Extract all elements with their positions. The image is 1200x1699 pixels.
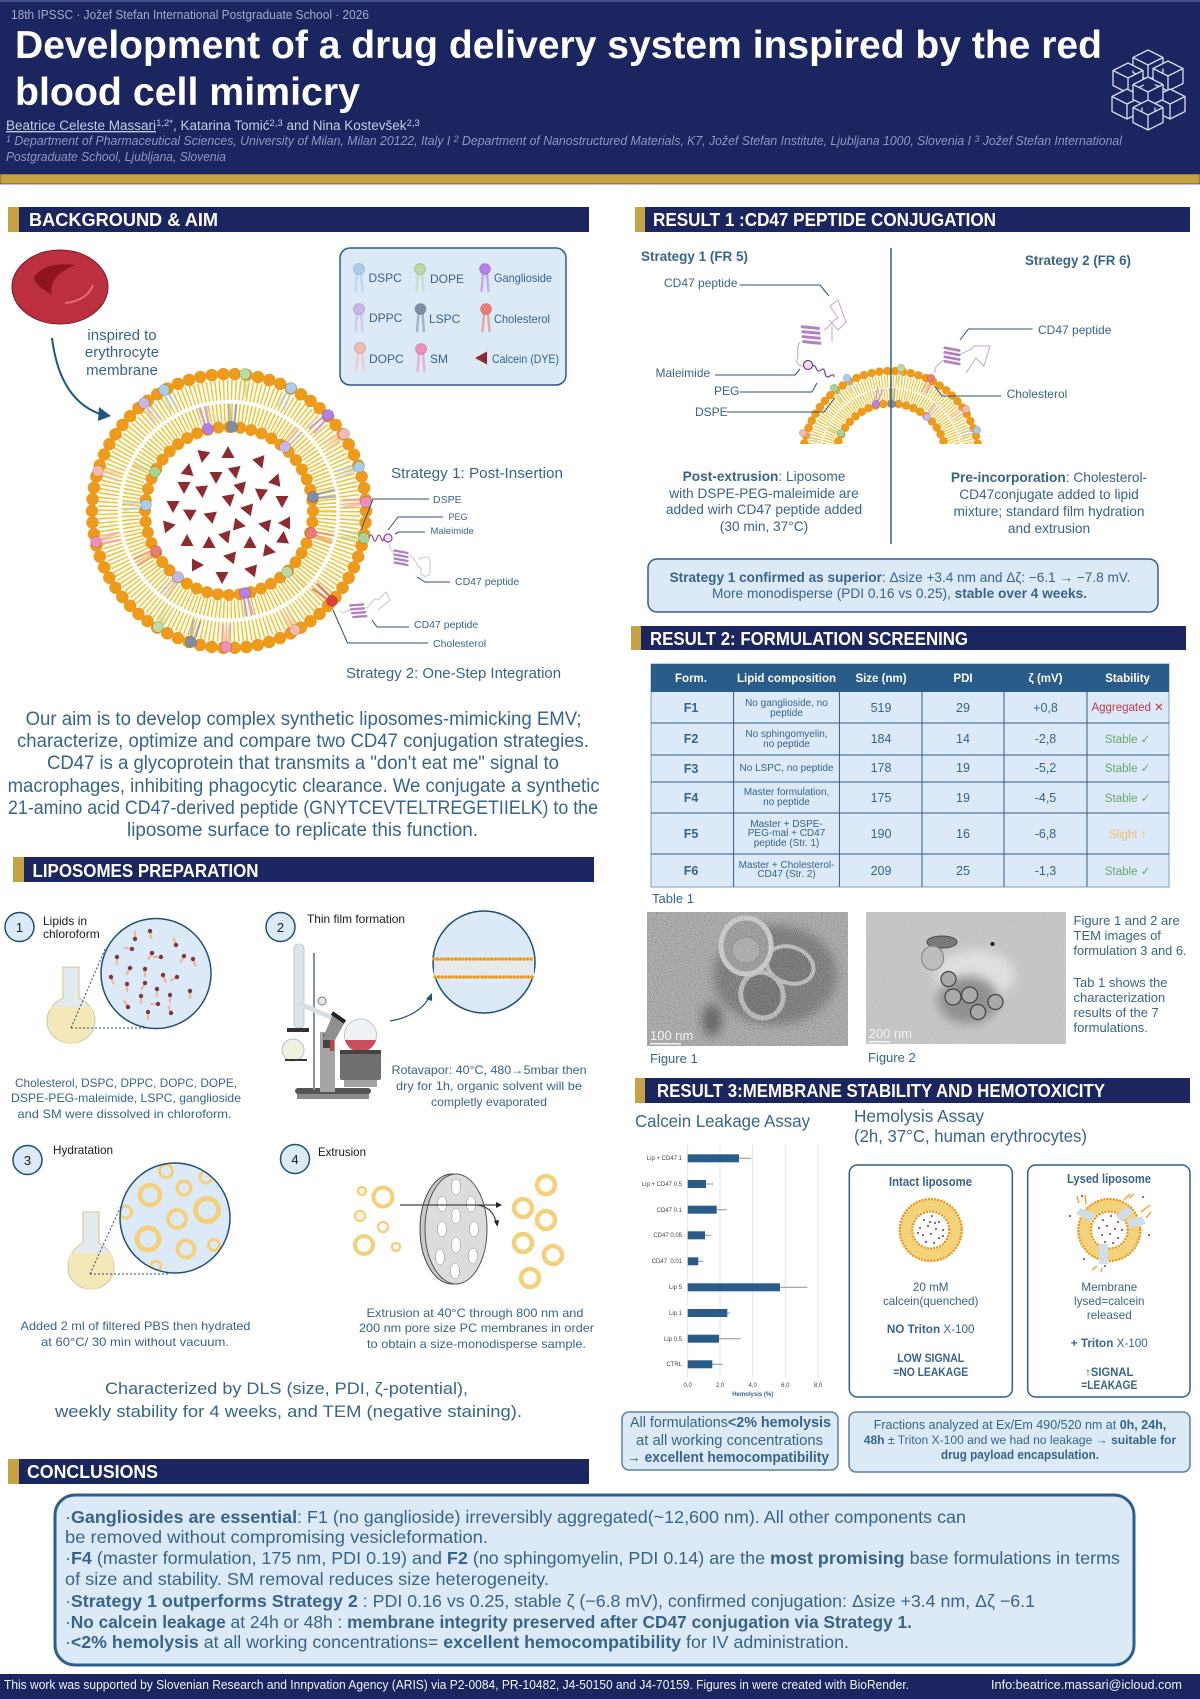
authors [6,118,420,133]
strategy 2 label: Strategy 2: One-Step Integration [346,665,561,682]
strategy 1 callouts: DSPE [695,405,728,419]
bar chart: hemolysis: Lip 1 [669,1311,683,1317]
affiliations: 2 [453,134,459,144]
step 1 description [11,1076,241,1121]
title: Development of a drug delivery system inspired by the red [15,24,1102,67]
bar chart: hemolysis: Lip 0.5 [664,1337,683,1343]
step 2 description: dry for 1h, organic solvent will be [396,1079,582,1093]
icon: polydisperse vesicles [355,1187,400,1254]
conclusions text: of size and stability. SM removal reduces size heterogeneity. [65,1569,549,1589]
legend: DPPC [369,311,403,325]
bar chart: hemolysis: CD47 0.01 [652,1259,683,1265]
table values: 29 [956,701,970,715]
step 1 description: and SM were dissolved in chloroform. [18,1107,232,1121]
aim paragraph: liposome surface to replicate this function. [127,820,478,841]
strategy 2 description [951,470,1147,536]
card: intact liposome: Intact liposome [889,1175,972,1189]
legend: DSPC [368,271,402,285]
bar chart: hemolysis: Lip + CD47 1 [647,1156,683,1162]
zoom circle: thin film [433,911,535,1013]
conclusions text: ·F4 (master formulation, 175 nm, PDI 0.19) and F2 (no sphingomyelin, PDI 0.14) are the most promising base formulations in terms [65,1548,1120,1568]
table lipid compositions: No LSPC, no peptide [740,763,834,774]
legend: DOPE [430,272,464,286]
title [15,24,1102,114]
table values: 190 [871,827,891,841]
bar chart: hemolysis: Lip 5 [669,1285,683,1291]
table row labels: F1 [684,701,698,715]
authors: , Katarina Tomić [173,118,270,133]
table values: 178 [871,761,891,775]
step 3 title: Hydratation [53,1143,113,1157]
table values [871,701,1058,878]
strategy 2 callouts [934,323,1112,401]
panel: background diagram [12,248,566,682]
bar chart: hemolysis: CD47 0.1 [657,1208,683,1214]
bar chart: hemolysis [642,1145,823,1398]
legend: LSPC [429,312,461,326]
table header: Form. [675,673,707,685]
panel: step 1 lipids in chloroform [5,912,241,1121]
callout: hemocompatibility: at all working concentrations [636,1432,823,1449]
figure description text: formulations. [1074,1020,1148,1035]
hemolysis heading: (2h, 37°C, human erythrocytes) [854,1126,1087,1146]
characterization text [54,1379,522,1421]
panel: conclusions [55,1495,1134,1665]
inspired to erythrocyte membrane label: membrane [86,362,158,379]
card: lysed liposome: + Triton X-100 [1071,1337,1148,1350]
step 4 description: 200 nm pore size PC membranes in order [359,1321,594,1335]
footer [0,1674,1200,1699]
step badge 1: 1 [16,920,23,935]
title: blood cell mimicry [15,71,360,114]
arrow: rbc to liposome [52,338,111,421]
step badge 1 [5,912,34,942]
callout: strategy 1 superior [648,559,1158,612]
step 1 description: DSPE-PEG-maleimide, LSPC, ganglioside [11,1091,241,1105]
step badge 4: 4 [291,1152,299,1167]
conclusions text: ·Strategy 1 outperforms Strategy 2 : PDI 0.16 vs 0.25, stable ζ (−6.8 mV), confirmed conjugation: Δsize +3.4 nm, Δζ −6.1 [65,1591,1035,1611]
table stability [1091,702,1164,878]
legend: DOPC [369,352,404,366]
table values: 519 [871,701,891,715]
bar chart: hemolysis: 8,0 [814,1383,823,1389]
callout: hemocompatibility: All formulations<2% hemolysis [630,1414,831,1431]
authors: 2,3 [270,118,283,129]
step 1 title [43,914,100,941]
heading: background and aim: BACKGROUND & AIM [29,210,218,230]
bar chart: hemolysis: CTRL [666,1362,683,1368]
table values: -1,3 [1035,864,1056,878]
strategy 2 callouts: Cholesterol [1007,387,1067,401]
bar chart: hemolysis: CD47 0.05 [653,1233,683,1239]
table stability: Slight ↑ [1109,829,1146,841]
strategy 2 description: CD47conjugate added to lipid [959,487,1139,502]
aim paragraph: macrophages, inhibiting phagocytic clearance. We conjugate a synthetic [8,776,600,797]
affiliations: Jožef Stefan International [979,134,1123,148]
table values: -2,8 [1035,732,1056,746]
step 2 description: completly evaporated [431,1095,547,1109]
heading: result 1: RESULT 1 :CD47 PEPTIDE CONJUGATION [653,210,996,230]
inspired to erythrocyte membrane label: inspired to [87,327,157,344]
heading: result 2 [631,626,1186,650]
calcein heading: Calcein Leakage Assay [635,1111,810,1131]
figure description text [1074,913,1186,1035]
strategy 1 label: Strategy 1: Post-Insertion [391,465,563,482]
table header: Stability [1105,673,1151,685]
strategy 1 description: with DSPE-PEG-maleimide are [668,486,859,501]
strategy 2 callouts: Cholesterol [433,638,486,650]
table caption: Table 1 [652,891,694,906]
conclusions text: ·<2% hemolysis at all working concentrations= excellent hemocompatibility for IV administration. [65,1632,849,1652]
conclusions text: ·No calcein leakage at 24h or 48h : membrane integrity preserved after CD47 conjugation via Strategy 1. [65,1612,912,1632]
card: lysed liposome: Lysed liposome [1067,1172,1151,1186]
footer: This work was supported by Slovenian Research and Innpvation Agency (ARIS) via P2-0084, PR-10482, J4-50150 and J4-70159. Figures in were created with BioRender. [4,1678,909,1692]
legend: Ganglioside [494,271,552,285]
affiliations: Postgraduate School, Ljubljana, Slovenia [6,150,226,164]
zoom circle: lipids in solvent [101,918,211,1028]
aim paragraph: CD47 is a glycoprotein that transmits a "don't eat me" signal to [47,753,559,774]
strategy 1 description [666,469,862,534]
step badge 2 [266,912,295,942]
strategy 2 callouts: CD47 peptide [414,619,478,631]
strategy 1 description: (30 min, 37°C) [720,519,808,534]
table values: -5,2 [1035,761,1056,775]
characterization text: Characterized by DLS (size, PDI, ζ-potential), [105,1379,468,1398]
table lipid compositions: no peptide [763,739,810,750]
bar chart: hemolysis: 0,0 [684,1383,693,1389]
strategy 1 description: Post-extrusion: Liposome [683,469,845,484]
card: lysed liposome: released [1087,1309,1132,1322]
table lipid compositions: peptide (Str. 1) [754,838,819,849]
table lipid compositions: Master formulation, [744,787,829,798]
card: lysed liposome: lysed=calcein [1074,1295,1145,1308]
table values: -4,5 [1035,791,1056,805]
figure 2: TEM image [866,912,1066,1044]
step 2 description: Rotavapor: 40°C, 480→5mbar then [392,1063,586,1077]
characterization text: weekly stability for 4 weeks, and TEM (negative staining). [54,1402,522,1421]
card: intact liposome: 20 mM [913,1281,949,1294]
figure description text: formulation 3 and 6. [1074,943,1186,958]
table values: 184 [871,732,891,746]
table row labels: F2 [684,732,698,746]
card: lysed liposome: ↑SIGNAL [1085,1366,1133,1379]
half liposome diagram [799,364,982,444]
step badge 2: 2 [277,920,284,935]
step 4 description: Extrusion at 40°C through 800 nm and [366,1306,584,1320]
strategy 1 callouts: Maleimide [656,366,711,380]
legend: Cholesterol [494,312,550,326]
figure 1: TEM image [647,912,848,1046]
table values: 209 [871,864,891,878]
table lipid compositions: no peptide [763,797,810,808]
heading: liposomes preparation [13,857,594,882]
figure description text: characterization [1074,990,1165,1005]
affiliations: Department of Pharmaceutical Sciences, University of Milan, Milan 20122, Italy I [11,134,454,148]
aim paragraph [8,709,600,841]
table lipid compositions [739,698,834,880]
step 1 title: chloroform [43,927,100,941]
heading: conclusions: CONCLUSIONS [27,1462,158,1482]
table lipid compositions: PEG-mal + CD47 [748,828,826,839]
step 4 description [359,1306,594,1351]
table stability: Stable ✓ [1105,793,1150,805]
strategy 1 callouts: PEG [714,384,739,398]
step 4 description: to obtain a size-monodisperse sample. [367,1337,586,1351]
card: lysed liposome: =LEAKAGE [1081,1379,1137,1392]
table row labels: F6 [684,864,698,878]
callout: hemocompatibility: → excellent hemocompatibility [627,1449,830,1466]
conclusions text [65,1507,1120,1652]
card: intact liposome: =NO LEAKAGE [893,1366,968,1379]
table header: Size (nm) [855,673,907,685]
affiliations: Department of Nanostructured Materials, K7, Jožef Stefan Institute, Ljubljana 1000, Slovenia I [459,134,974,148]
table header: Lipid composition [737,673,836,685]
header banner [0,0,1200,184]
table: formulation screening [651,664,1169,887]
figure 1: TEM image: 100 nm [650,1028,693,1043]
table header [675,673,1151,685]
authors: 1,2* [156,118,173,129]
icon: monodisperse vesicles [514,1176,562,1287]
figure 2 caption: Figure 2 [868,1050,916,1065]
table row labels [684,701,698,878]
conclusions text: be removed without compromising vesicleformation. [65,1527,488,1547]
callout: fractions: 48h ± Triton X-100 and we had no leakage → suitable for [864,1433,1177,1447]
step badge 4 [280,1144,310,1174]
table values: 14 [956,732,970,746]
table row labels: F3 [684,762,698,776]
hemolysis heading: Hemolysis Assay [854,1106,984,1126]
callout: strategy 1 superior: More monodisperse (PDI 0.16 vs 0.25), stable over 4 weeks. [712,586,1087,601]
table stability: Aggregated ✕ [1091,702,1164,714]
strategy 1 callouts [361,494,519,588]
panel: step 4 extrusion [280,1144,594,1351]
strategy 1 callouts: Maleimide [430,526,474,537]
table values: 19 [956,791,970,805]
aim paragraph: Our aim is to develop complex synthetic liposomes-mimicking EMV; [26,709,582,730]
affiliations [6,134,1123,164]
legend: SM [430,352,448,366]
table lipid compositions: peptide [770,708,803,719]
strategy 2 heading: Strategy 2 (FR 6) [1025,253,1131,268]
step 3 description: Added 2 ml of filtered PBS then hydrated [20,1319,251,1333]
strategy 1 callouts: DSPE [433,494,462,506]
strategy 1 callouts: PEG [448,512,468,522]
figure description text: results of the 7 [1074,1005,1159,1020]
strategy 1 description: added wirh CD47 peptide added [666,502,862,517]
table lipid compositions: Master + Cholesterol- [739,860,834,871]
inspired to erythrocyte membrane label: erythrocyte [85,344,159,361]
authors: and Nina Kostevšek [283,118,407,133]
heading: liposomes preparation: LIPOSOMES PREPARATION [32,861,258,881]
inspired to erythrocyte membrane label [85,327,159,379]
bar chart: hemolysis: Hemolysis (%) [732,1392,773,1398]
hemolysis heading [854,1106,1087,1146]
strategy 1 callouts: CD47 peptide [664,276,738,290]
card: lysed liposome: Membrane [1081,1281,1137,1294]
step badge 3 [13,1146,42,1174]
bar chart: hemolysis: 4,0 [749,1383,758,1389]
card: intact liposome [849,1165,1012,1397]
icon: flask with lipids [47,947,149,1043]
zoom circle: hydrated vesicles [120,1163,230,1273]
table values: +0,8 [1033,701,1058,715]
panel: hemolysis assay [849,1106,1190,1472]
icon: membrane filter [400,1174,502,1284]
step 2 title: Thin film formation [307,912,405,926]
heading: result 3: RESULT 3:MEMBRANE STABILITY AND HEMOTOXICITY [657,1081,1105,1101]
callout: fractions: Fractions analyzed at Ex/Em 490/520 nm at 0h, 24h, [874,1418,1166,1432]
table stability: Stable ✓ [1105,734,1150,746]
table row labels: F4 [684,791,698,805]
heading: result 3 [635,1078,1190,1103]
step 1 title: Lipids in [43,914,87,928]
heading: background and aim [8,207,589,232]
aim paragraph: characterize, optimize and compare two CD47 conjugation strategies. [17,731,589,752]
icon: flask with buffer [68,1207,168,1289]
icon: lysed liposome [1069,1194,1151,1272]
liposome diagram [89,368,372,653]
icon: red blood cell [12,250,108,324]
heading: result 2: RESULT 2: FORMULATION SCREENING [650,629,968,649]
strategy 1 heading: Strategy 1 (FR 5) [641,249,748,264]
calcein triangles [163,446,290,584]
table values: 175 [871,791,891,805]
authors: 2,3 [407,118,420,129]
step 1 description: Cholesterol, DSPC, DPPC, DOPC, DOPE, [15,1076,237,1090]
aim paragraph: 21-amino acid CD47-derived peptide (GNYTCEVTELTREGETIIELK) to the [8,798,598,819]
table lipid compositions: No sphingomyelin, [745,729,828,740]
strategy 1 callouts [656,276,846,419]
strategy 2 description: Pre-incorporation: Cholesterol- [951,470,1147,485]
table lipid compositions: Master + DSPE- [750,819,823,830]
affiliations: 3 [974,134,979,144]
table stability: Stable ✓ [1105,763,1150,775]
figure description text: Tab 1 shows the [1074,975,1167,990]
table header: PDI [953,673,973,685]
table stability: Stable ✓ [1105,866,1150,878]
legend: Calcein (DYE) [492,352,559,366]
table header: ζ (mV) [1028,673,1063,685]
authors: Beatrice Celeste Massari [6,118,156,133]
figure description text: Figure 1 and 2 are [1074,913,1180,928]
card: intact liposome: NO Triton X-100 [887,1323,975,1336]
bar chart: hemolysis: 6,0 [781,1383,790,1389]
panel: step 2 thin film formation [266,911,586,1109]
figure description text: TEM images of [1074,928,1161,943]
strategy 2 callouts: CD47 peptide [1038,323,1112,337]
strategy 2 callouts [333,592,486,650]
footer: Info:beatrice.massari@icloud.com [991,1678,1182,1692]
step 2 description [392,1063,586,1109]
heading: result 1 [635,207,1190,232]
card: intact liposome: LOW SIGNAL [897,1352,964,1365]
conclusions text: ·Gangliosides are essential : F1 (no ganglioside) irreversibly aggregated(~12,600 nm). All other components can [65,1507,966,1527]
table lipid compositions: No ganglioside, no [745,698,828,709]
legend [340,248,566,385]
card: lysed liposome [1028,1165,1190,1397]
step 3 description: at 60°C/ 30 min without vacuum. [41,1335,229,1349]
table values: 19 [956,761,970,775]
table values: 25 [956,864,970,878]
bar chart: hemolysis: Lip + CD47 0.5 [642,1182,683,1188]
icon: rotary evaporator [282,944,381,1099]
conference line: 18th IPSSC · Jožef Stefan International Postgraduate School · 2026 [11,7,369,22]
callout: strategy 1 superior: Strategy 1 confirmed as superior: Δsize +3.4 nm and Δζ: −6.1 → −7.8 mV. [670,570,1130,585]
strategy 2 description: and extrusion [1008,521,1090,536]
figure 1 caption: Figure 1 [650,1051,698,1066]
arrow: to thin film [390,993,432,1021]
bar chart: hemolysis: 2,0 [716,1383,725,1389]
callout: fractions: drug payload encapsulation. [941,1448,1099,1462]
table row labels: F5 [684,827,698,841]
logo: cubes [1112,50,1185,130]
callout: fractions [849,1412,1190,1472]
table values: 16 [956,827,970,841]
card: intact liposome: calcein(quenched) [883,1295,979,1308]
table values: -6,8 [1035,827,1056,841]
step badge 3: 3 [24,1153,31,1168]
heading: conclusions [8,1459,589,1484]
affiliations: 1 [6,134,11,144]
figure 2: TEM image: 200 nm [869,1026,912,1041]
panel: calcein leakage [622,1111,838,1470]
panel: step 3 hydratation [13,1143,251,1349]
divider [890,248,892,544]
strategy 1 callouts: CD47 peptide [455,576,519,588]
strategy 2 description: mixture; standard film hydration [954,504,1144,519]
icon: intact liposome [900,1199,962,1261]
panel: result 1 strategies [641,248,1158,612]
step 3 description [20,1319,251,1349]
step 4 title: Extrusion [318,1145,366,1159]
table lipid compositions: CD47 (Str. 2) [757,869,816,880]
callout: hemocompatibility [622,1412,838,1470]
